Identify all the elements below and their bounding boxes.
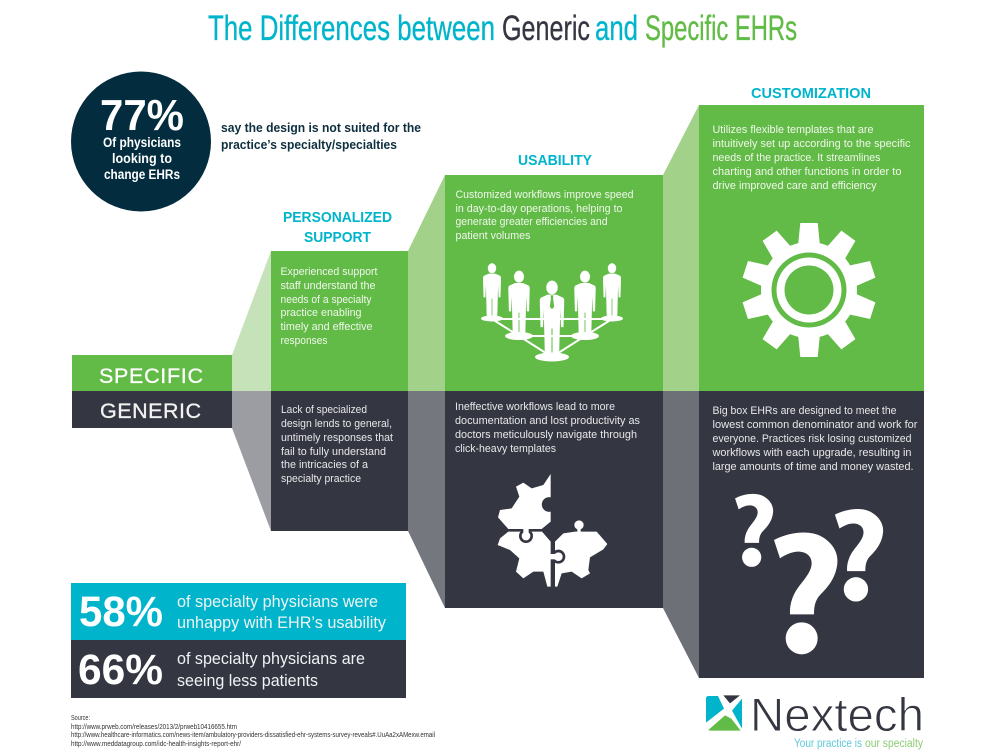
- logo: Nextech: [706, 688, 924, 750]
- panel: specific personalized support: practice enabling: [280, 307, 362, 319]
- sources: Source:: [71, 713, 90, 722]
- connector: specific to personalized support: [232, 251, 271, 391]
- panel: specific personalized support: Experienced support: [280, 266, 378, 278]
- label: generic: GENERIC: [100, 399, 201, 423]
- panel: generic customization: Big box EHRs are designed to meet the: [712, 405, 896, 417]
- icon: question marks: [735, 494, 883, 654]
- connector: generic to support: [232, 391, 271, 531]
- panel: generic personalized support: the intricacies of a: [281, 459, 369, 471]
- title: Specific EHRs: [645, 9, 797, 48]
- stat: 58%: unhappy with EHR’s usability: [177, 613, 386, 632]
- panel: generic customization: large amounts of time and money wasted.: [712, 461, 914, 473]
- panel: generic customization: workflows with each upgrade, resulting in: [712, 447, 912, 459]
- callout: 77% of physicians: change EHRs: [104, 167, 180, 182]
- panel: generic usability: documentation and lost productivity as: [455, 415, 640, 427]
- panel: specific customization: drive improved care and efficiency: [712, 180, 877, 192]
- icon: gear: [742, 223, 876, 357]
- callout: 77% of physicians: [71, 72, 211, 212]
- callout: 77% of physicians: looking to: [112, 151, 172, 166]
- panel: specific usability: in day-to-day operations, helping to: [456, 203, 622, 215]
- title: The Differences between: [208, 9, 495, 48]
- stat: 58%: of specialty physicians were: [177, 592, 378, 611]
- panel: specific usability: [445, 175, 663, 391]
- connector: usability to customization: [663, 105, 699, 391]
- connector: personalized support to usability: [408, 175, 445, 391]
- logo: Nextech: Nextech: [750, 688, 924, 741]
- connector: support to workflows: [408, 391, 445, 608]
- heading: personalized support: SUPPORT: [304, 229, 371, 246]
- logo: Nextech: Your practice is: [794, 738, 862, 750]
- stat: 66%: seeing less patients: [177, 671, 318, 690]
- panel: generic customization: everyone. Practices risk losing customized: [712, 433, 912, 445]
- label: specific: SPECIFIC: [99, 364, 203, 388]
- panel: generic personalized support: specialty practice: [281, 473, 361, 485]
- callout: 77% of physicians: 77%: [100, 91, 184, 140]
- panel: generic customization: lowest common denominator and work for: [712, 419, 918, 431]
- panel: specific usability: generate greater efficiencies and: [456, 216, 608, 228]
- callout text: practice’s specialty/specialties: [221, 138, 397, 152]
- panel: specific usability: Customized workflows improve speed: [456, 189, 634, 201]
- panel: specific personalized support: staff understand the: [280, 280, 376, 292]
- panel: specific customization: intuitively set up according to the specific: [712, 138, 911, 150]
- callout: 77% of physicians: Of physicians: [103, 135, 181, 150]
- stat: 58%: 58%: [79, 588, 163, 636]
- panel: generic usability: click-heavy templates: [455, 443, 556, 455]
- panel: specific customization: charting and other functions in order to: [712, 166, 902, 178]
- panel: generic personalized support: untimely responses that: [281, 432, 393, 444]
- panel: specific usability: patient volumes: [456, 230, 531, 242]
- panel: generic personalized support: Lack of specialized: [281, 404, 367, 416]
- panel: specific personalized support: [271, 251, 408, 391]
- stat: 58%: [71, 583, 406, 640]
- icon: connected team: [481, 263, 623, 362]
- sources: http://www.prweb.com/releases/2013/2/prweb10416655.htm: [71, 722, 237, 731]
- heading: personalized support: [283, 209, 392, 246]
- title: Generic: [502, 9, 590, 48]
- sources: http://www.healthcare-informatics.com/news-item/ambulatory-providers-dissatisfied-ehr-systems-survey-reveals#.UuAa2xAMexw.email: [71, 730, 435, 739]
- panel: specific personalized support: timely and effective: [280, 321, 372, 333]
- label: generic: [72, 391, 232, 428]
- heading: usability: USABILITY: [518, 152, 592, 169]
- title: and: [595, 9, 638, 48]
- panel: specific customization: [699, 105, 924, 391]
- panel: generic personalized support: fail to fully understand: [281, 446, 386, 458]
- callout text: [221, 121, 421, 152]
- icon: broken puzzle gear: [498, 474, 607, 587]
- panel: specific customization: needs of the practice. It streamlines: [712, 152, 881, 164]
- panel: specific personalized support: responses: [280, 335, 328, 347]
- connector: workflows to upgrades: [663, 391, 699, 678]
- panel: specific customization: Utilizes flexible templates that are: [712, 124, 874, 136]
- label: specific: [72, 355, 232, 391]
- panel: generic personalized support: [271, 391, 408, 531]
- panel: generic usability: doctors meticulously navigate through: [455, 429, 637, 441]
- panel: generic usability: [445, 391, 663, 608]
- stat: 66%: 66%: [78, 646, 163, 694]
- callout text: say the design is not suited for the: [221, 121, 421, 135]
- sources: http://www.meddatagroup.com/idc-health-insights-report-ehr/: [71, 739, 242, 748]
- icon: logo mark: [706, 695, 742, 731]
- panel: generic customization: [699, 391, 924, 678]
- panel: specific personalized support: needs of a specialty: [280, 294, 372, 306]
- stat: 66%: of specialty physicians are: [177, 649, 365, 668]
- heading: personalized support: PERSONALIZED: [283, 209, 392, 226]
- stat: 66%: [71, 640, 406, 698]
- title: [208, 9, 797, 48]
- sources: [71, 713, 435, 748]
- panel: generic usability: Ineffective workflows lead to more: [455, 401, 615, 413]
- panel: generic personalized support: design lends to general,: [281, 418, 392, 430]
- logo: Nextech: our specialty: [865, 738, 923, 750]
- heading: customization: CUSTOMIZATION: [751, 85, 871, 102]
